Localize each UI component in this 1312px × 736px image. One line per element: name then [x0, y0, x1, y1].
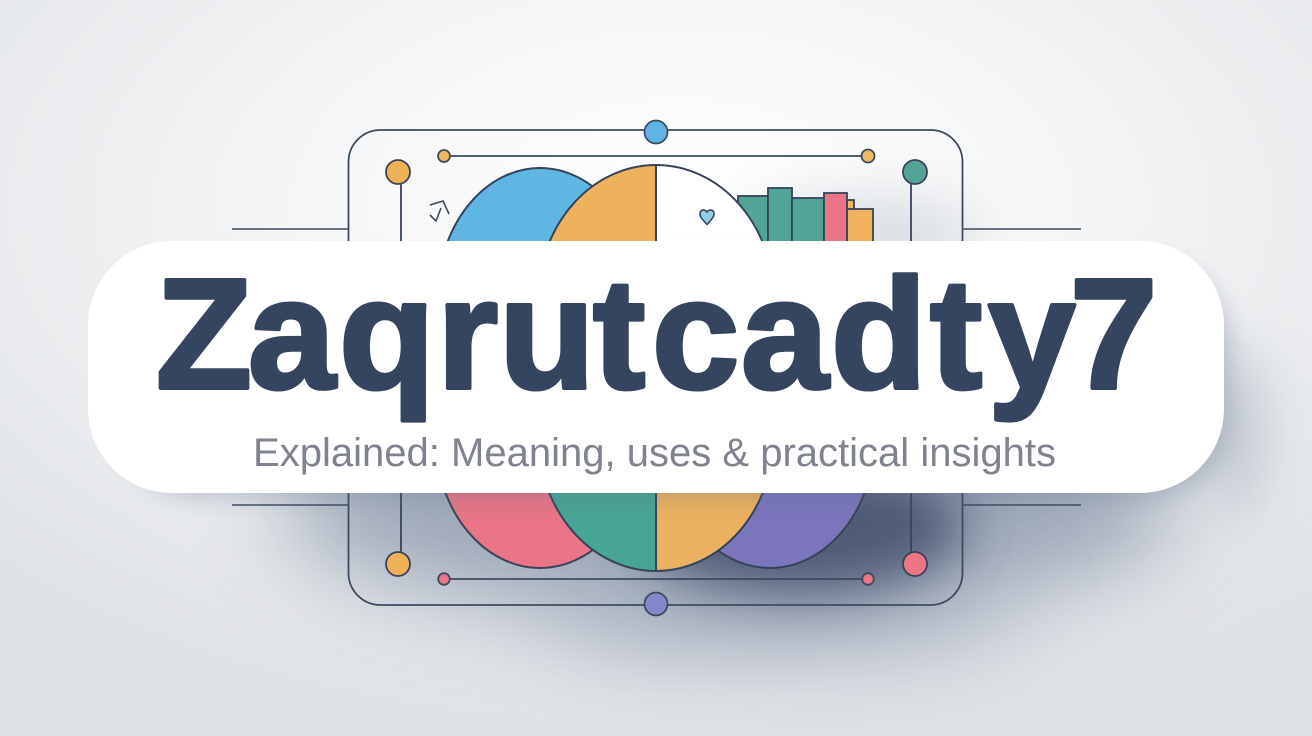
top node: [644, 120, 668, 144]
bottom inner connector: [438, 573, 874, 585]
side connector lines: [232, 229, 1081, 505]
panel: title card: [88, 241, 1224, 493]
segment: orange top: [548, 164, 656, 241]
segment: green bottom: [548, 493, 656, 572]
segment: purple: [665, 302, 875, 568]
segment: orange bottom: [656, 493, 764, 572]
icon: heart: [700, 210, 714, 224]
lollipop: bottom right: [903, 490, 927, 576]
segment: white top: [656, 164, 764, 241]
bottom node: [644, 592, 668, 616]
card shadow: [120, 262, 1230, 498]
lollipop: top left: [386, 160, 410, 250]
icon: small glyph: [430, 201, 449, 221]
top inner connector: [438, 150, 874, 162]
chart: overlapping lobes: [435, 165, 875, 571]
title: Zaqrutcadty7: [156, 247, 1157, 422]
segment: blue: [437, 168, 643, 432]
panel: rounded frame: [348, 130, 962, 605]
segment: pink: [435, 302, 645, 568]
soft shadow behind illustration: [280, 195, 1265, 655]
lollipop: top right: [903, 160, 927, 250]
lollipop: bottom left: [386, 490, 410, 576]
chart: bars: [738, 188, 873, 256]
subtitle: Explained: Meaning, uses & practical insights: [253, 431, 1056, 475]
